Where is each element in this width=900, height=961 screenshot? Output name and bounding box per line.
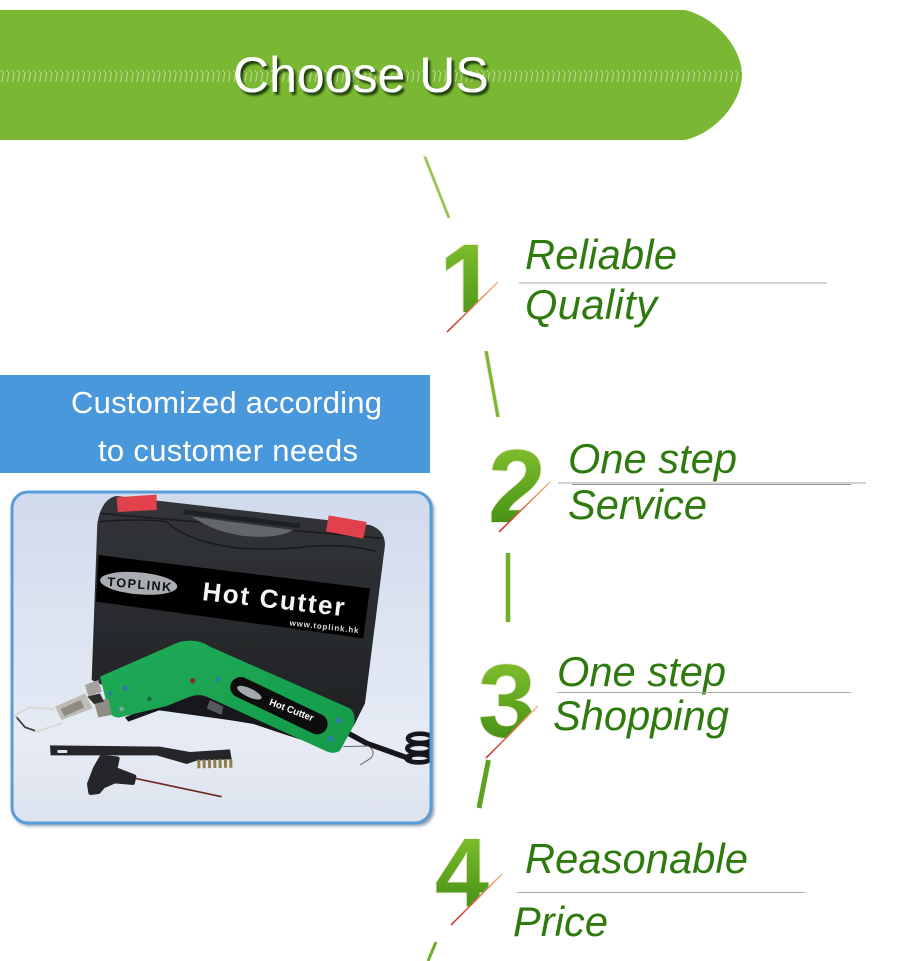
timeline dash 3 bbox=[506, 553, 510, 622]
blue callout bbox=[0, 375, 430, 473]
toplink logo bbox=[100, 572, 178, 595]
cutter blade head bbox=[15, 680, 112, 732]
label line 2: Quality bbox=[525, 281, 659, 328]
item 2: one step service bbox=[490, 444, 866, 532]
timeline dash 5 bbox=[428, 942, 436, 961]
number 1: 1 bbox=[439, 221, 497, 350]
number 3: 3 bbox=[478, 644, 536, 760]
label line 1: Reliable bbox=[525, 231, 677, 278]
callout line 2: to customer needs bbox=[98, 433, 358, 468]
underline 3 bbox=[557, 692, 851, 694]
underline 1 bbox=[519, 282, 827, 284]
cable bbox=[343, 733, 432, 765]
gun body: Hot Cutter bbox=[268, 697, 315, 724]
slash 1 bbox=[447, 282, 498, 332]
number 2: 2 bbox=[488, 429, 546, 545]
toplink logo: TOPLINK bbox=[107, 575, 173, 595]
slash 3 bbox=[486, 706, 538, 758]
underline 2 bbox=[558, 483, 866, 484]
number 4: 4 bbox=[435, 818, 489, 927]
banner bbox=[0, 10, 742, 140]
hex key bbox=[89, 757, 222, 797]
gun trigger and shadow bbox=[125, 693, 333, 750]
red latches bbox=[117, 495, 157, 512]
label line 2: Shopping bbox=[553, 692, 729, 739]
timeline dash 2 bbox=[486, 351, 498, 417]
wire brush bbox=[50, 745, 234, 764]
label line 2: Price bbox=[513, 898, 608, 945]
underline 4 bbox=[517, 892, 805, 894]
item 1: reliable quality bbox=[445, 238, 827, 332]
photo panel: hot cutter kit bbox=[12, 492, 434, 826]
photo content bbox=[15, 495, 432, 797]
slash 2 bbox=[499, 482, 550, 532]
black band bbox=[96, 555, 370, 638]
label line 1: One step bbox=[557, 648, 726, 695]
label line 1: One step bbox=[568, 435, 737, 482]
gun body bbox=[100, 641, 354, 753]
case url: www.toplink.hk bbox=[288, 618, 360, 635]
slash 4 bbox=[451, 874, 502, 925]
timeline dash 4 bbox=[479, 760, 488, 808]
timeline dash 1 bbox=[424, 155, 449, 218]
item 3: one step shopping bbox=[479, 656, 851, 758]
item 4: reasonable price bbox=[436, 838, 805, 936]
carrying case bbox=[92, 495, 385, 727]
label line 2: Service bbox=[568, 481, 707, 528]
title: Choose US bbox=[233, 47, 489, 103]
label line 1: Reasonable bbox=[525, 835, 748, 882]
callout line 1: Customized according bbox=[71, 385, 382, 420]
case title: Hot Cutter bbox=[201, 576, 346, 622]
photo frame bbox=[12, 492, 431, 823]
